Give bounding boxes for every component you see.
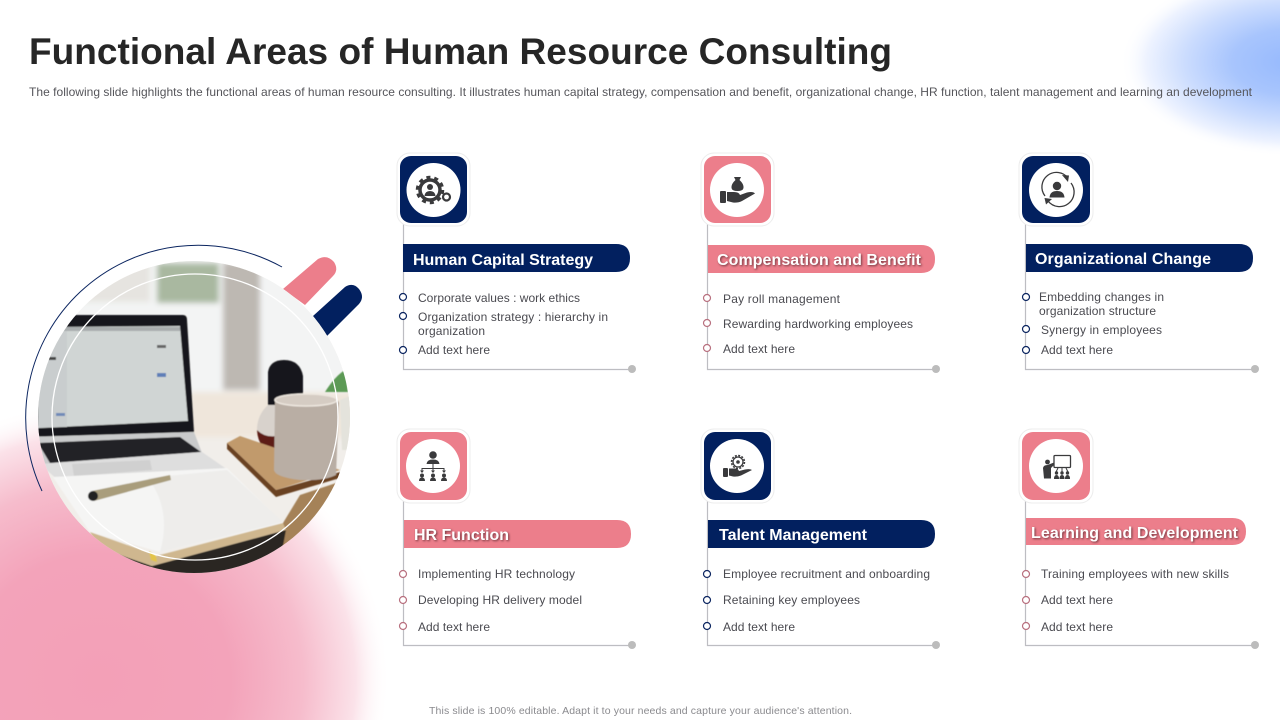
icon box (701, 153, 774, 226)
heading banner (708, 245, 935, 273)
bullet list: Rewarding hardworking employees (723, 317, 913, 331)
icon box (397, 153, 470, 226)
pen (92, 475, 171, 501)
icon: hand holding money bag (720, 177, 755, 203)
bullet list: Organization strategy : hierarchy in (418, 310, 608, 324)
panel: talent management (701, 429, 940, 649)
bullet list: Add text here (418, 620, 490, 634)
bullet list: organization structure (1039, 304, 1156, 318)
bullet list: Add text here (1041, 593, 1113, 607)
panel: learning and development: Learning and Development (1031, 525, 1239, 542)
bullet list: Synergy in employees (1041, 323, 1162, 337)
bullet list (704, 567, 930, 634)
laptop (30, 315, 194, 437)
panel: human capital strategy: Human Capital Strategy (413, 252, 593, 269)
background: blue glow (1118, 0, 1280, 158)
ring: white inner (52, 274, 338, 560)
bullet list (400, 567, 582, 634)
background: pink glow (0, 400, 392, 720)
bullet list (704, 292, 913, 356)
mug (274, 395, 339, 480)
bullet list (1022, 567, 1229, 634)
bullet list: Add text here (1041, 620, 1113, 634)
heading banner (1026, 244, 1253, 272)
icon: hand holding gear (723, 456, 752, 477)
panel: compensation and benefit: Compensation and Benefit (717, 252, 922, 269)
heading banner (708, 520, 935, 548)
bullet list: Add text here (1041, 343, 1113, 357)
plant (325, 370, 348, 392)
panel: hr function (397, 429, 636, 649)
panel: organizational change: Organizational Change (1035, 251, 1211, 268)
bullet list: Employee recruitment and onboarding (723, 567, 930, 581)
footer note: This slide is 100% editable. Adapt it to your needs and capture your audience's attention. (429, 705, 852, 717)
bottle (268, 360, 303, 407)
icon box (1019, 429, 1093, 503)
bullet list: Developing HR delivery model (418, 593, 582, 607)
panel: compensation and benefit (701, 153, 940, 373)
icon: hierarchy (419, 451, 447, 481)
panel: organizational change (1019, 153, 1259, 373)
bullet list: Add text here (723, 342, 795, 356)
bullet list: Implementing HR technology (418, 567, 575, 581)
bullet list: Retaining key employees (723, 593, 860, 607)
bullet list (400, 291, 608, 357)
bullet list: Training employees with new skills (1041, 567, 1229, 581)
notebook (53, 468, 283, 552)
panel: talent management: Talent Management (719, 527, 868, 544)
bullet list: Add text here (418, 343, 490, 357)
accent pill: pink (283, 257, 336, 305)
panel: hr function: HR Function (414, 527, 509, 544)
title: Functional Areas of Human Resource Consulting (29, 31, 892, 72)
subtitle: The following slide highlights the functional areas of human resource consulting. It illustrates human capital strategy, compensation and benefit, organizational change, HR function, talent management and learning an development (29, 85, 1253, 99)
accent pill: navy (313, 285, 362, 336)
heading banner (403, 244, 630, 272)
panel: human capital strategy (397, 153, 636, 373)
heading banner (1026, 518, 1246, 545)
heading banner (404, 520, 631, 548)
arc: navy outer (26, 245, 282, 491)
bullet list: organization (418, 324, 485, 338)
photo: desk with laptop (30, 255, 360, 580)
icon box (1019, 153, 1093, 226)
icon box (701, 429, 774, 503)
icon: person with change arrows (1042, 172, 1074, 207)
bullet list: Add text here (723, 620, 795, 634)
panel: learning and development (1019, 429, 1259, 649)
wooden board (227, 436, 340, 490)
bullet list: Corporate values : work ethics (418, 291, 580, 305)
bullet list: Embedding changes in (1039, 290, 1164, 304)
bullet list (1022, 290, 1164, 357)
icon: presenter at board (1043, 456, 1070, 479)
icon: gear with person (418, 178, 450, 202)
icon box (397, 429, 470, 503)
table edge (276, 482, 336, 546)
bullet list: Pay roll management (723, 292, 841, 306)
